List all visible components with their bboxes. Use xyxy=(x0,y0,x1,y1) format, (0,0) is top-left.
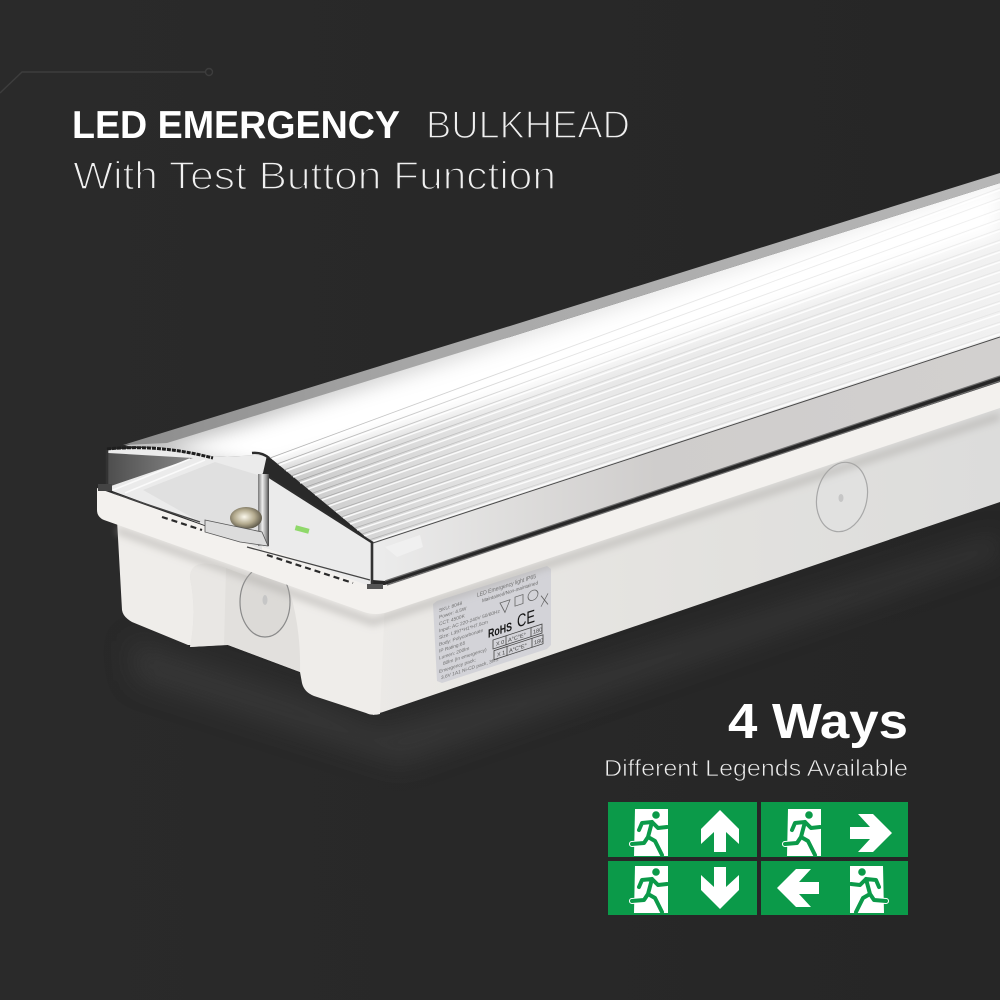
certification marks: RoHS xyxy=(488,619,512,641)
certification marks xyxy=(488,605,535,641)
arrow right xyxy=(850,814,892,852)
callout: 4 Ways xyxy=(604,695,908,781)
arrow left xyxy=(777,869,819,907)
spec text: SKU: 8048 xyxy=(439,601,462,614)
running man xyxy=(785,811,820,855)
sign: exit left xyxy=(761,861,908,915)
arrow up xyxy=(701,810,739,852)
spec text: Input: AC 220-240V 50/60Hz xyxy=(439,609,500,634)
metal post xyxy=(258,474,269,546)
caption: Different Legends Available xyxy=(604,755,908,781)
title line 1 light: BULKHEAD xyxy=(426,104,630,147)
door xyxy=(634,866,668,913)
spec text: Power: 4.5W xyxy=(439,606,467,621)
subtitle: With Test Button Function xyxy=(73,155,556,198)
cap right edge xyxy=(252,453,269,458)
knockout circle side xyxy=(810,458,874,536)
end recess xyxy=(190,564,300,672)
title xyxy=(72,104,630,198)
trailing foot outline xyxy=(632,900,646,901)
body side face xyxy=(373,400,1000,715)
test button green xyxy=(295,525,310,534)
cap diagonal edge xyxy=(263,473,373,543)
title line 1 bold: LED EMERGENCY xyxy=(72,104,400,147)
white tray edges xyxy=(113,459,205,493)
lens bottom line xyxy=(373,337,1000,543)
cap foot right xyxy=(367,584,383,589)
transparent end cap xyxy=(98,447,383,589)
sign: exit up xyxy=(608,802,757,857)
lens white ridges xyxy=(272,190,1000,542)
knockout circle end xyxy=(240,567,290,637)
spec text: Lumen: 200lm xyxy=(439,646,469,662)
spec text: Emergency pack: xyxy=(439,657,476,675)
spec text: CCT: 4500K xyxy=(439,613,465,628)
white flange xyxy=(97,382,1000,614)
rating table: A°C°E° xyxy=(508,632,526,644)
base dashes xyxy=(162,517,353,583)
top gray strip xyxy=(123,173,1000,445)
compliance icons xyxy=(500,585,548,620)
silver rim xyxy=(385,376,1000,585)
clamp xyxy=(205,520,268,546)
rating table xyxy=(493,624,543,660)
spec text: Body: Polycarbonate xyxy=(439,628,483,648)
rating table: 180 xyxy=(533,627,542,636)
label heading: LED Emergency light IP65 xyxy=(477,573,536,599)
product label xyxy=(433,566,551,683)
dark window xyxy=(108,453,193,487)
running man xyxy=(632,811,667,855)
rating table: X 1 xyxy=(497,650,505,659)
door xyxy=(634,809,668,856)
rating table: 180 xyxy=(534,638,543,647)
spec text: IP Rating:65 xyxy=(439,640,465,655)
serrated cap edge xyxy=(107,448,213,458)
product: emergency bulkhead luminaire xyxy=(97,173,1000,715)
spec text: Size: L397*H1*H7.5cm xyxy=(439,619,488,641)
floor reflection xyxy=(130,535,1000,765)
certification marks: CE xyxy=(517,605,535,631)
cap foot xyxy=(98,484,112,491)
ribbed lens xyxy=(125,183,1000,543)
spec text xyxy=(439,588,500,682)
door xyxy=(787,809,821,856)
sign: exit down xyxy=(608,861,757,915)
base dark lines xyxy=(113,493,370,580)
lens gray ridges xyxy=(270,188,1000,540)
heading: 4 Ways xyxy=(728,695,908,749)
flange shadow on body xyxy=(117,416,1000,622)
spec text: 80lm (in emergency) xyxy=(443,647,487,667)
end recess shade xyxy=(190,564,226,647)
rating table: A°C°E° xyxy=(509,643,527,655)
decorative circuit line xyxy=(0,68,212,93)
door and man mirrored xyxy=(850,866,886,913)
running man xyxy=(632,868,667,912)
arrow down xyxy=(701,867,739,909)
small clip on lens xyxy=(385,535,423,557)
metal screw xyxy=(230,507,262,529)
spec text: 3.6V 1A1 Ni-CD pack, 3hrs xyxy=(441,657,499,681)
cap verticals xyxy=(107,450,372,587)
trailing foot outline xyxy=(632,843,646,844)
lens top glow xyxy=(165,185,1000,470)
inner tray xyxy=(143,462,262,550)
trailing foot outline xyxy=(785,843,799,844)
body end face xyxy=(117,520,385,715)
label heading: Maintained/Non-maintained xyxy=(482,580,538,604)
sign: exit right xyxy=(761,802,908,857)
label heading xyxy=(477,572,538,606)
lens tray xyxy=(373,337,1000,581)
rating table: X 0 xyxy=(496,639,504,648)
